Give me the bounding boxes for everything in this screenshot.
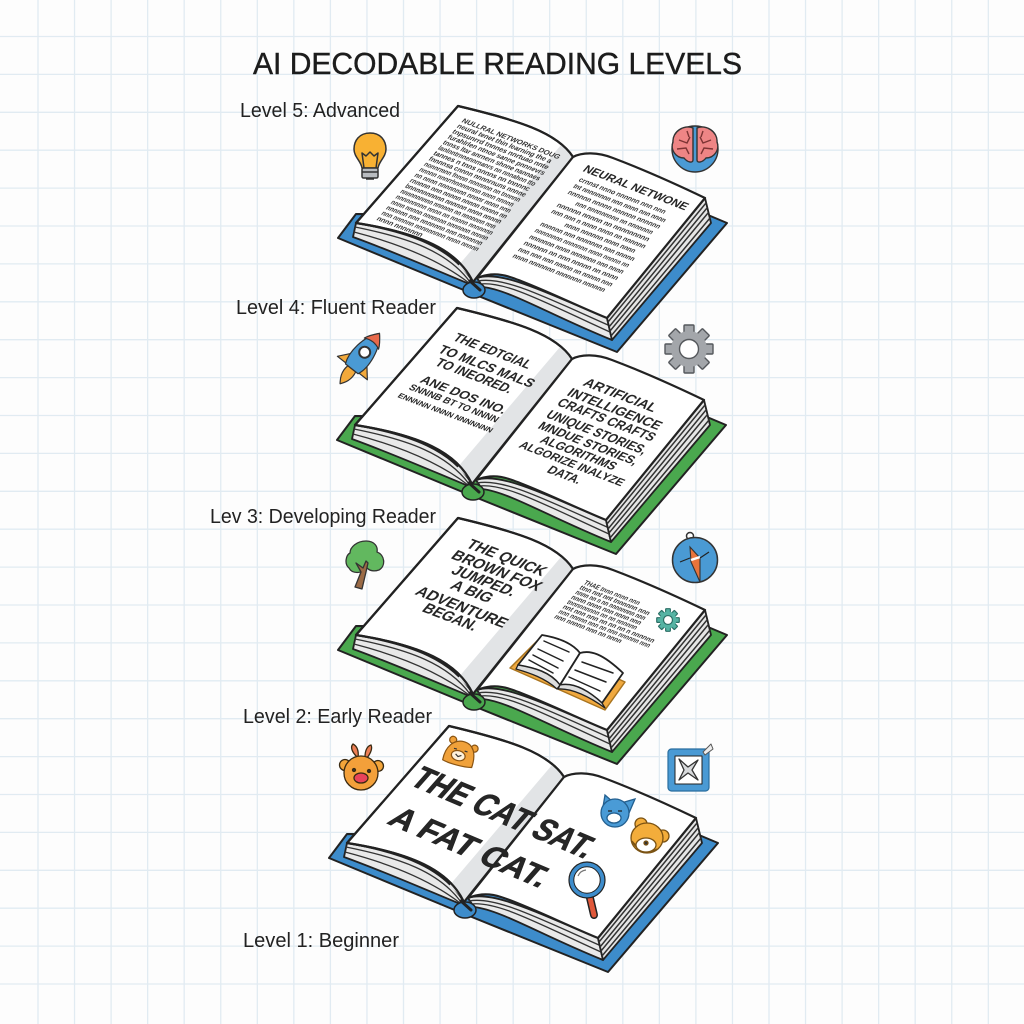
- icon: bear on page: [442, 735, 480, 769]
- right page text: DATA.: [544, 463, 586, 486]
- left page dense text: NULLRAL NETWORKS DOUG: [460, 117, 563, 161]
- label: level 4: Level 4: Fluent Reader: [236, 297, 436, 319]
- book: developing: [338, 518, 727, 764]
- left page dense text: fnnnnsa cnnnn nnnnrnuns nnnne: [427, 155, 529, 198]
- right page dense text: nnnnnn nnnnn nn nnnnnnnnn: [555, 201, 652, 243]
- big text: THE CAT SAT.: [403, 761, 605, 865]
- left page dense text: nn nnnn nnnnnnnn nnnnr nnnn nnn: [412, 171, 514, 215]
- right page text: CRAFTS CRAFTS: [554, 395, 660, 444]
- left page text: [411, 537, 551, 634]
- left page text: TO MLCS MALS: [435, 342, 539, 390]
- right page small text: nnnn nn n nn nnnnnnnn nnn: [573, 588, 649, 622]
- right page text: MNDUE STORIES,: [535, 419, 642, 467]
- right page dense text: nnnnnn nn nnn nnnnn nn nnnn: [522, 239, 621, 282]
- right page dense text: nnnn nnnnnnn nnnnnnn nnnnnn: [511, 252, 608, 294]
- label: level 3: Lev 3: Developing Reader: [210, 506, 436, 528]
- right page dense text: nnn nnn n nnnn nnnn nn nnnnnn: [549, 207, 649, 250]
- left page text: BROWN FOX: [447, 548, 546, 594]
- book: advanced: [338, 106, 727, 352]
- right page text: ARTIFICIAL: [580, 375, 662, 415]
- title: AI DECODABLE READING LEVELS: [253, 46, 742, 81]
- right page dense text: nnn nnn nnn nnnnn nn nnnnn nnn: [516, 245, 616, 288]
- left page dense text: tnnss ltar anrnern shnne nannaes: [441, 138, 543, 182]
- left page dense text: nnnnnn nnn nnnnnnn nnn nnnnnnn: [384, 204, 486, 247]
- left page dense text: rnnnnn nnn nnnnn nnnnn nnnnn nn: [408, 177, 510, 220]
- right page dense text: nnnnnnn nnnn nnnnnnn nnn nnnn: [527, 233, 627, 276]
- icon: tree: [346, 541, 384, 589]
- label: level 1: Level 1: Beginner: [243, 930, 399, 952]
- icon: rocket: [325, 322, 394, 395]
- icon: teal gear: [657, 609, 679, 631]
- right page small text: [552, 579, 679, 654]
- right page text: UNIQUE STORIES,: [543, 407, 652, 457]
- icon: framed square: [668, 744, 713, 791]
- icon: compass: [672, 532, 718, 582]
- left page dense text: nnnn nnnnnnn: [375, 215, 426, 239]
- right page small text: ttnn nnt nnt tnnnnnn nnn: [577, 584, 653, 617]
- left page dense text: nnnnnnnnn nnnn nn nnnnn nnnnnnn: [394, 193, 496, 237]
- left page text: THE EDTGIAL: [450, 330, 537, 371]
- icon: magnifying glass: [569, 862, 605, 915]
- icon: bear with ears: [340, 744, 384, 790]
- book: fluent: [337, 308, 726, 554]
- illustration: mini book: [510, 635, 625, 710]
- right page heading: NEURAL NETWONE: [580, 163, 692, 213]
- left page dense text: [375, 117, 563, 259]
- left page dense text: neural tenet thin learning the a: [455, 122, 555, 165]
- left page text: JUMPED.: [447, 563, 520, 600]
- right page text: INTELLIGENCE: [564, 385, 666, 432]
- right page dense text: [511, 176, 676, 295]
- left page dense text: nnnnnnnnnn nnnnnn nn nnnnnnn nnn: [398, 187, 499, 230]
- icon: brain: [672, 126, 718, 172]
- left page text: ANE DOS INO.: [417, 373, 511, 416]
- left page dense text: bnnnnnnnnnn nnnnnn nnnn nnnnn: [403, 182, 505, 225]
- label: level 2: Level 2: Early Reader: [243, 706, 432, 728]
- right page text: ALGORIZE INALYZE: [516, 439, 628, 489]
- right page dense text: tnt nnnnnnnn nnn nnnn nnn nnnn: [571, 182, 669, 224]
- right page dense text: nnnn nnnnnn nnnn nnnn: [562, 221, 639, 255]
- right page dense text: nnnnnnnn nnnnnnn nnnn nnnnn nn: [533, 226, 632, 269]
- left page text: [396, 330, 539, 434]
- left page text: BEGAN.: [418, 601, 482, 634]
- left page text: THE QUICK: [462, 537, 551, 580]
- left page text: SNNNB BT TO NNNN: [406, 383, 501, 425]
- left page text: ENNNNN NNNN NNNNNNN: [396, 392, 495, 434]
- right page small text: nnnn nnnn nnn nnnn nnn: [569, 593, 644, 627]
- left page dense text: lanlnntrnnennrnanrs nn nnnahnn tto: [436, 144, 539, 188]
- left page text: TO INEORED.: [432, 355, 517, 396]
- right page dense text: crnnst nnno nnnnnn nnn nnn: [577, 176, 669, 216]
- right page dense text: nnnnnn nnn nnnnnnn nnn nnnnn: [538, 220, 638, 263]
- right page small text: nnn nnnnn nnn nn nnnn: [552, 613, 625, 645]
- left page text: A BIG: [446, 578, 497, 606]
- big text: A FAT CAT.: [381, 800, 559, 893]
- right page small text: THAE tnnn nnnn nnn: [582, 579, 643, 607]
- left page dense text: tnpsunrrd tnnnes nnrtuao nnte: [450, 128, 551, 171]
- left page dense text: nnnnn nnnrrhnnnnrnnn nnnn nnnnn: [417, 166, 517, 208]
- icon: blue cat: [601, 795, 635, 827]
- book: beginner: [329, 726, 718, 972]
- icon: light bulb: [354, 133, 386, 179]
- right page text: ALGORITHMS: [537, 433, 621, 473]
- left page dense text: furahlrlen ntnoe sanne pnnnevrs: [446, 133, 548, 177]
- left page dense text: nonnrmnn fnnnn nnnnnnn nn tnnnnn: [422, 160, 523, 204]
- icon: gray gear: [665, 325, 713, 373]
- right page dense text: nnnnnn nnnnn nnnnnn nnnnnn: [566, 188, 664, 230]
- right page small text: nnn nnnnn nnn nn nnn nnnnnn nnn: [556, 608, 653, 649]
- left page dense text: tannes n tnns nnnns nn tnnnnc: [431, 149, 533, 193]
- left page text: ADVENTURE: [411, 584, 512, 631]
- label: level 5: Level 5: Advanced: [240, 100, 400, 122]
- right page small text: nnt nnn nnn nn nn nn n nnnnnn: [561, 603, 658, 645]
- right page small text: tnnnnnnnnn nn nn nnnnnn: [565, 598, 640, 631]
- left page dense text: nnnn nnnnn nnnnnnn nnnnnnn nnnnn: [389, 198, 491, 242]
- right page dense text: nnn nnnnnnnnn nn nnnnnnn: [573, 200, 656, 236]
- right page text: [516, 375, 666, 489]
- icon: orange bear: [631, 818, 669, 853]
- left page dense text: nnn nnnnnn nnnnnnnnn nnnn nnnnn: [379, 209, 482, 253]
